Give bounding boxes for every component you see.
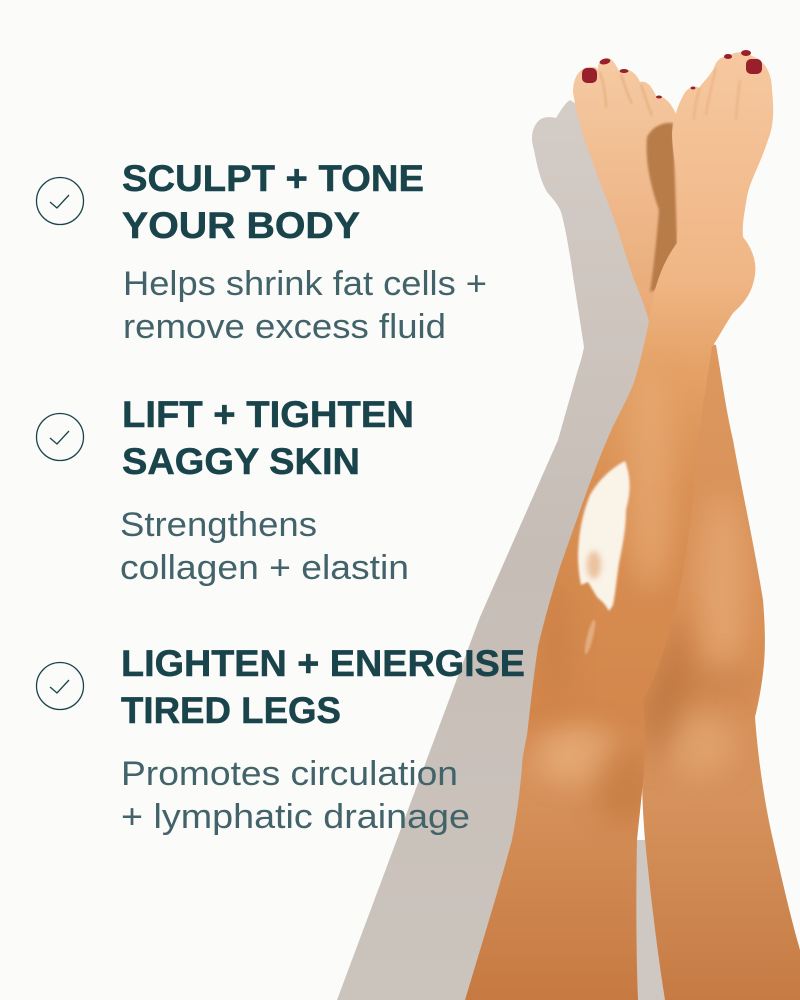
description 1: remove excess fluid [123, 308, 446, 346]
benefit 1 [36, 158, 487, 346]
description 3: Promotes circulation [121, 755, 458, 793]
cream smear [578, 461, 630, 611]
rear foot [573, 58, 680, 325]
heading 2 [122, 394, 414, 482]
icon: check circle 2 [36, 414, 84, 460]
heading 1 [122, 158, 424, 246]
heading 3: TIRED LEGS [121, 690, 341, 731]
description 3: + lymphatic drainage [121, 798, 470, 836]
rear leg [638, 340, 800, 1000]
toenails [582, 50, 762, 98]
description 1: Helps shrink fat cells + [123, 265, 487, 303]
heading 3 [121, 643, 525, 731]
icon: check circle 3 [36, 662, 84, 710]
icon: check circle 1 [36, 178, 84, 224]
illustration: crossed legs [465, 50, 800, 1000]
benefit 3 [36, 643, 525, 836]
heading 1: YOUR BODY [122, 205, 360, 246]
wall shadow of the legs [337, 100, 667, 1000]
benefit 2 [36, 394, 414, 587]
description 2: collagen + elastin [120, 549, 409, 587]
description 1 [123, 265, 487, 346]
heading 2: SAGGY SKIN [122, 441, 360, 482]
heading 3: LIGHTEN + ENERGISE [121, 643, 525, 684]
heading 1: SCULPT + TONE [122, 158, 424, 199]
description 3 [121, 755, 470, 836]
front leg and foot [465, 52, 773, 1000]
description 2: Strengthens [120, 506, 317, 544]
heading 2: LIFT + TIGHTEN [122, 394, 414, 435]
description 2 [120, 506, 409, 587]
